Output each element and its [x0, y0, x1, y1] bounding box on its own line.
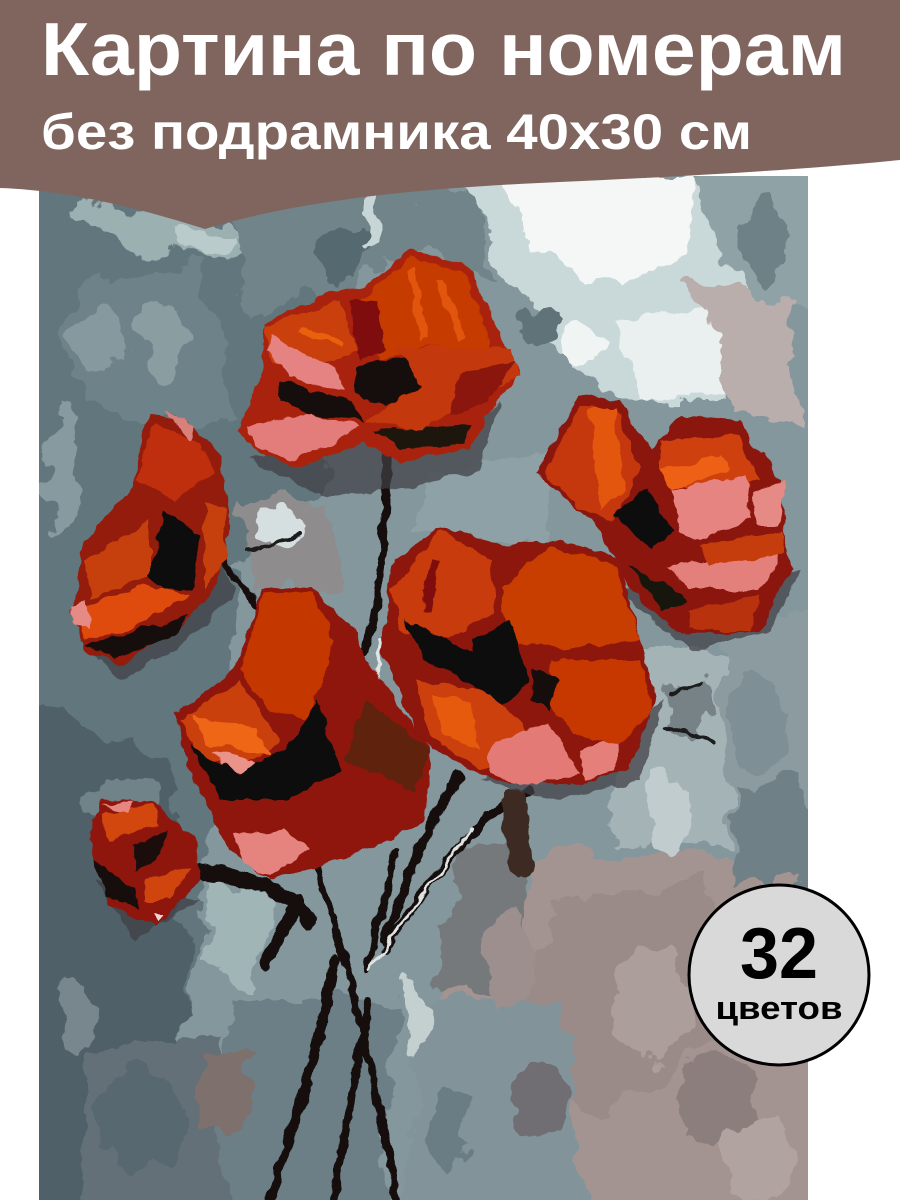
badge: 32 colours: цветов [716, 990, 842, 1026]
badge: 32 colours [689, 885, 869, 1065]
flower: left bud [72, 410, 230, 665]
header banner [0, 0, 900, 229]
flower: lower left [175, 585, 430, 880]
painting background [39, 176, 808, 1200]
flower: small bud [88, 800, 200, 928]
flower: top [238, 250, 520, 468]
flower: centre [380, 527, 655, 785]
flower shadows [80, 400, 800, 940]
title: Картина по номерам [41, 7, 846, 91]
painting [39, 176, 808, 1200]
subtitle: без подрамника 40х30 см [41, 104, 752, 160]
stems [195, 450, 715, 1200]
flower: right [537, 395, 790, 635]
badge: 32 colours: 32 [740, 914, 818, 994]
